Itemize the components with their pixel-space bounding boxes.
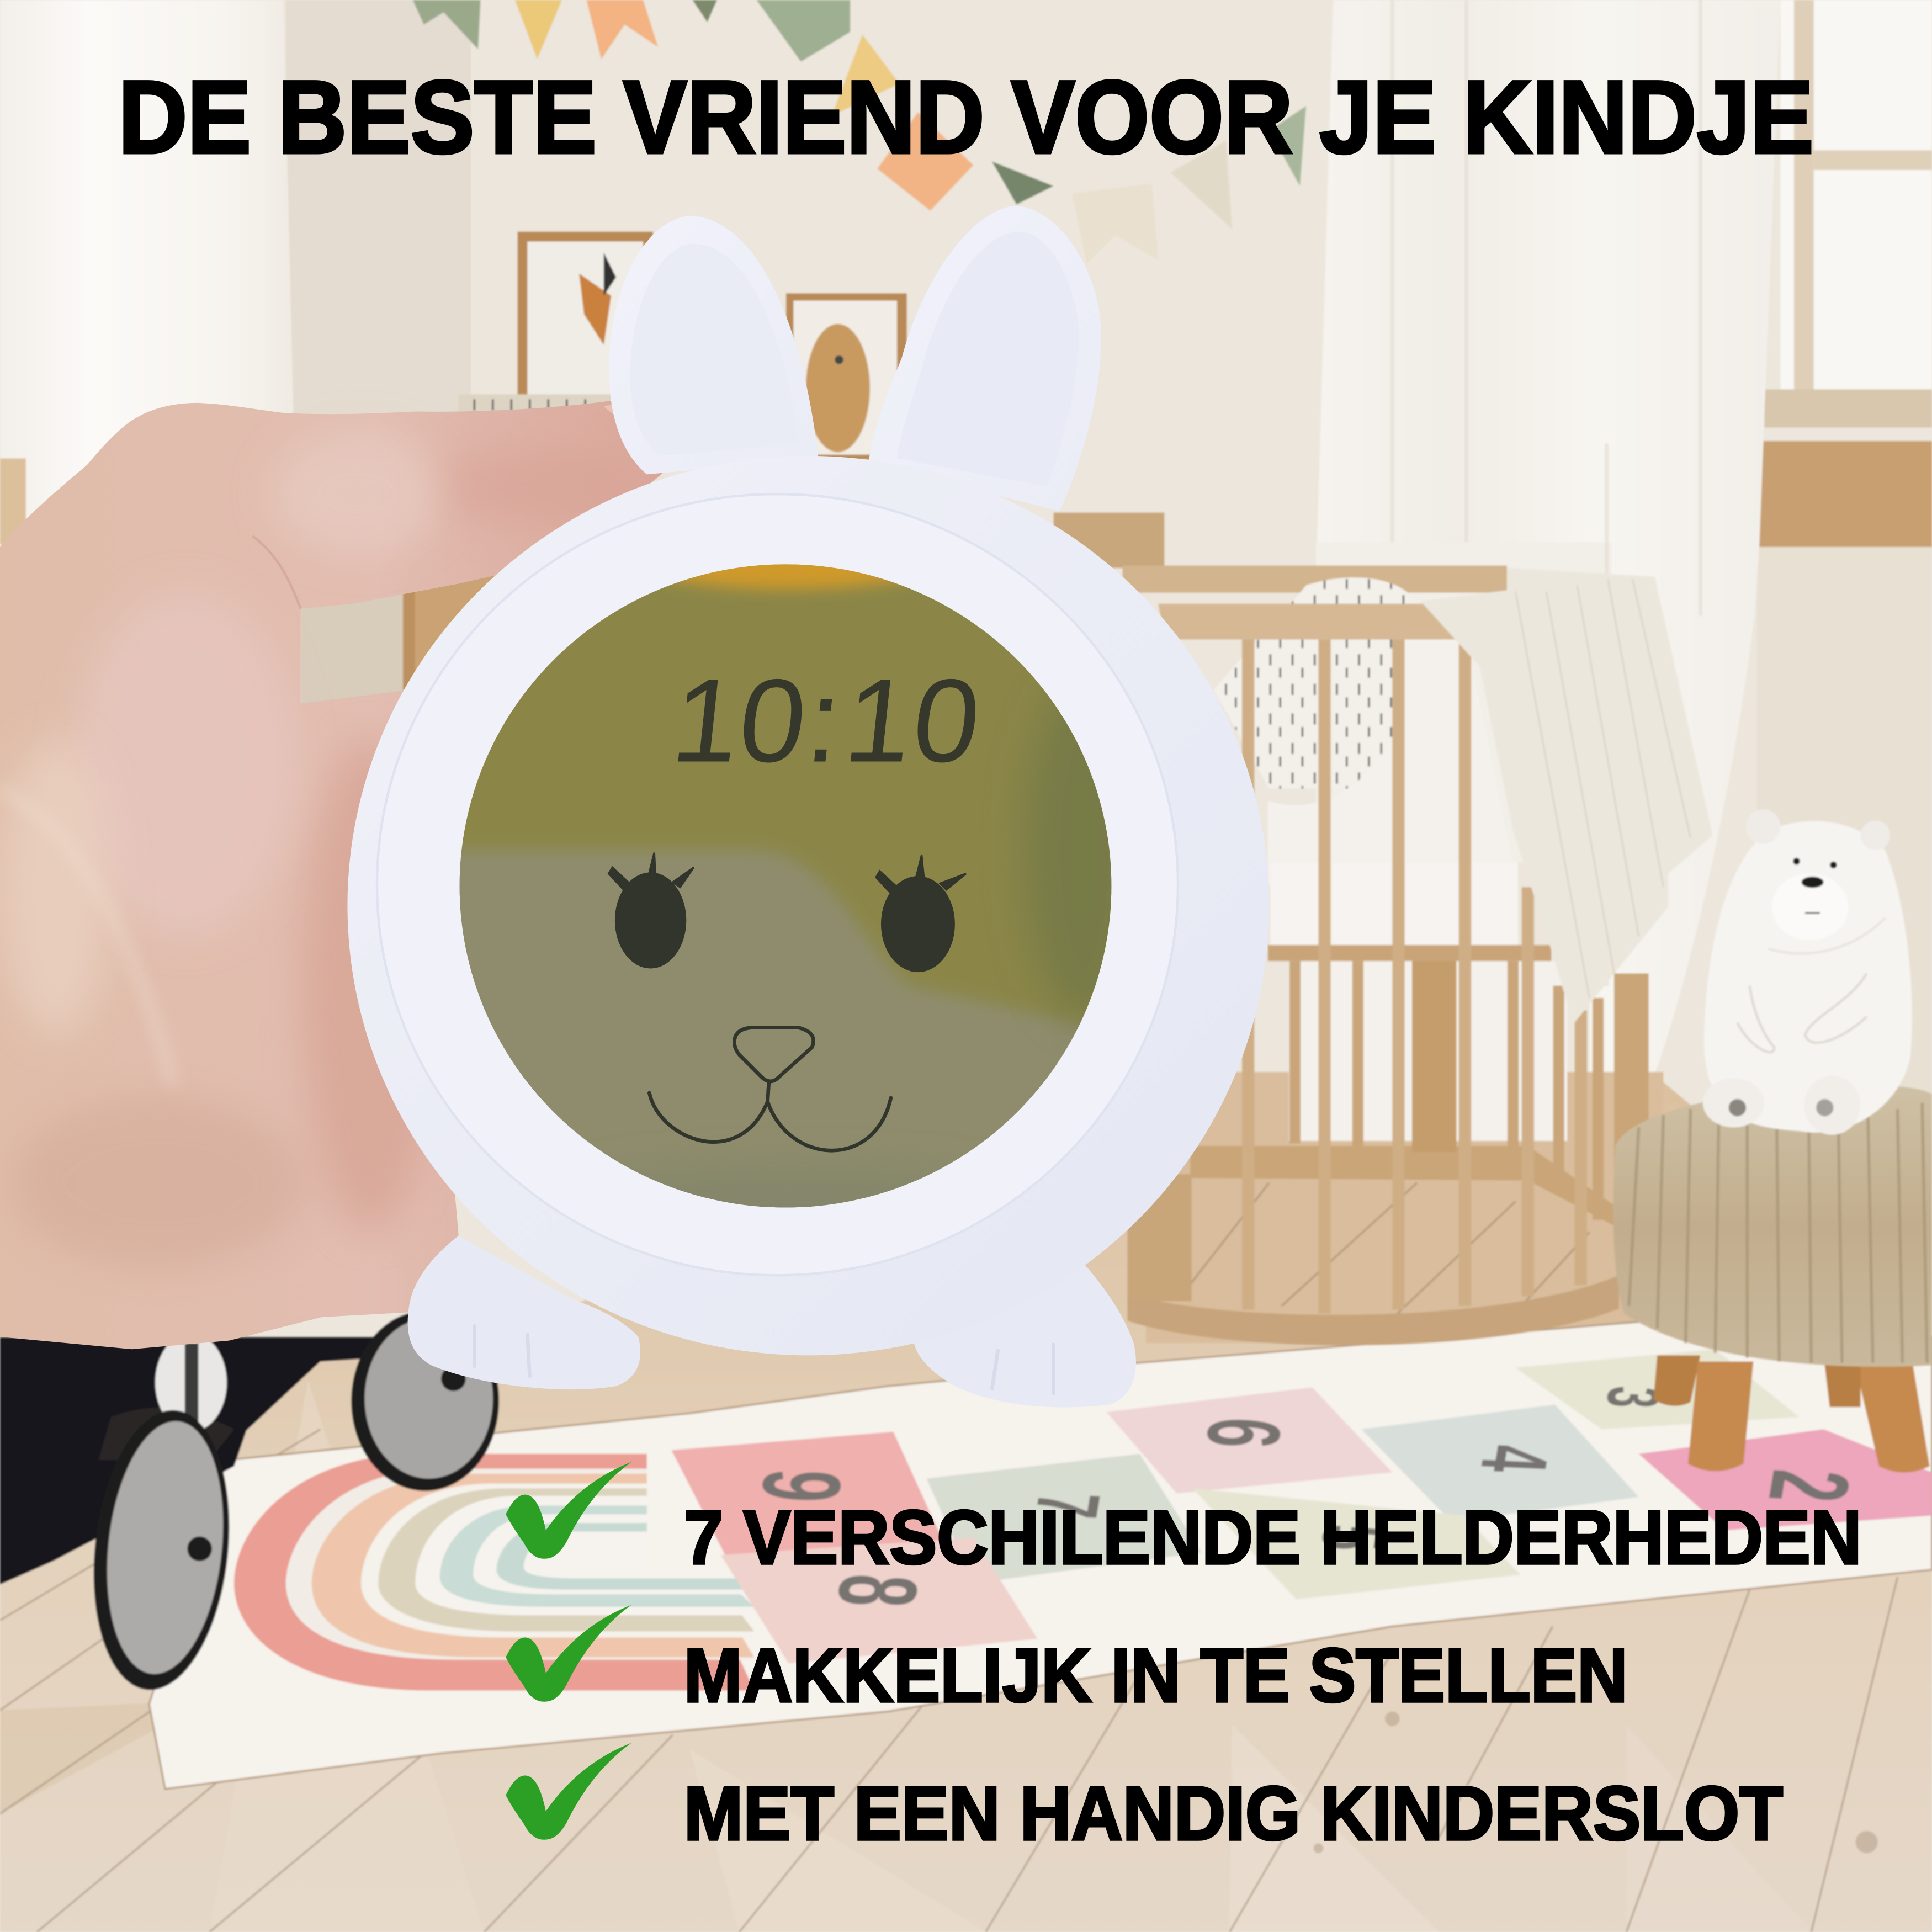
hopscotch numbers: 5 [1302,1522,1405,1553]
bunting [413,0,1306,264]
nose and mouth [649,1028,891,1150]
front rail [1158,604,1466,639]
floor planks [0,1380,1898,1932]
lcd time: 10:10 [666,654,986,787]
title: DE BESTE VRIEND VOOR JE KINDJE [118,59,1814,175]
mattress [1270,862,1518,945]
back bars [1295,961,1598,1220]
blanket [1421,568,1713,1024]
front wheel [351,1311,499,1491]
hopscotch numbers [737,1385,1874,1610]
hopscotch numbers: 6 [1184,1415,1304,1451]
middle rail [1268,945,1551,961]
fingernail [604,397,680,446]
back ring [1190,1146,1626,1232]
feature text 2: MAKKELIJK IN TE STELLEN [684,1633,1628,1718]
crib [1122,566,1713,1345]
pillow [1214,577,1417,789]
eye: right [876,855,966,972]
ear: right [869,206,1101,511]
front ring [1127,1275,1619,1345]
foot: left [408,1236,640,1389]
bedding [1268,639,1513,885]
curtain: left [0,0,301,715]
hopscotch numbers: 2 [1745,1467,1874,1505]
hand holding the clock [0,397,681,1349]
eye: left [609,853,694,968]
front bars [1248,639,1581,1313]
floor [0,1072,1932,1932]
window [1757,0,1932,1114]
number plate [155,1333,227,1432]
icon: green check 1 [506,1462,631,1559]
hopscotch numbers: 7 [1016,1490,1119,1521]
stroller [0,1311,499,1697]
lcd screen [459,564,1112,1208]
curtain: right [1316,0,1780,1084]
feature text 1: 7 VERSCHILENDE HELDERHEDEN [684,1495,1862,1580]
skin shading [302,739,437,1232]
wood behind left curtain [0,458,26,545]
foot: right [914,1244,1136,1408]
teddy bear [1703,810,1912,1135]
rainbow [234,1444,758,1690]
inner ring [377,494,1178,1275]
stool [1613,1085,1932,1472]
hopscotch numbers: 4 [1461,1443,1569,1475]
white cloth behind bars [1289,961,1567,1141]
foot toes [474,1325,1053,1395]
product: bunny clock [347,206,1269,1408]
clock body [347,456,1269,1355]
feature list [506,1462,1862,1856]
hopscotch numbers: 3 [1590,1385,1677,1410]
back rail [1122,566,1507,593]
picture frame: left [518,232,653,404]
feature text 3: MET EEN HANDIG KINDERSLOT [684,1771,1783,1856]
ear: left [609,216,818,474]
rug [149,1321,1932,1789]
hopscotch tiles [672,1432,943,1559]
wall corner shade [286,0,518,715]
icon: green check 2 [506,1605,631,1702]
rear wheel [81,1403,242,1697]
icon: green check 3 [506,1743,631,1840]
hopscotch numbers: 9 [737,1467,866,1505]
dresser [403,394,1164,690]
picture frame: tiger [786,293,907,460]
hopscotch numbers: 8 [814,1572,943,1610]
